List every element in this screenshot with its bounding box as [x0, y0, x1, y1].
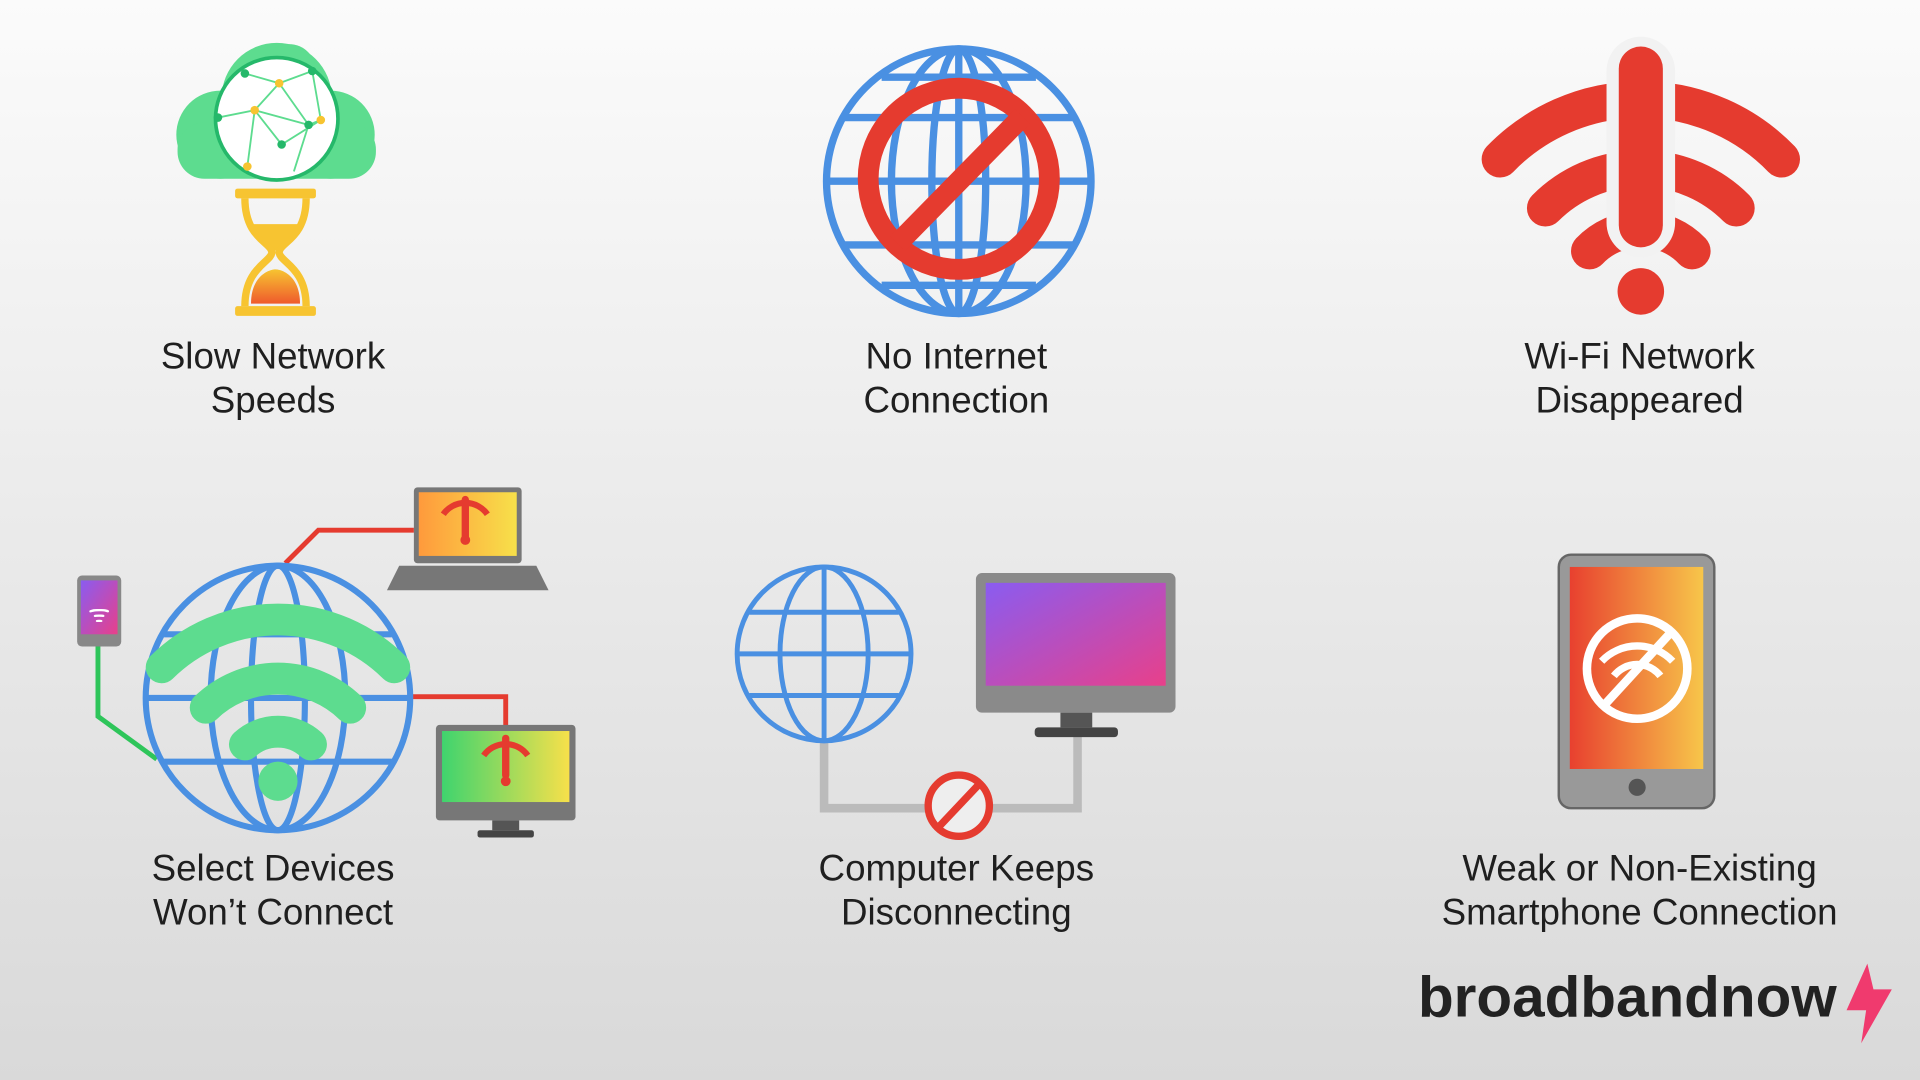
heading: select devices: Select Devices [152, 847, 394, 888]
icon: no internet globe [827, 49, 1091, 313]
logo: broadbandnow: broadbandnow [1418, 965, 1837, 1029]
icon: computer keeps disconnecting [737, 567, 1176, 836]
heading: select devices: Won’t Connect [153, 891, 393, 932]
heading: no internet: No Internet [865, 336, 1047, 377]
heading: slow network: Slow Network [161, 336, 385, 377]
icon: select devices: ᯤ [88, 601, 110, 628]
icon: select devices [77, 487, 576, 838]
icon: slow network (cloud + hourglass) [176, 43, 376, 316]
heading: smartphone: Smartphone Connection [1442, 891, 1838, 932]
heading: computer keeps disconnecting: Computer Keeps [819, 847, 1094, 888]
icon: smartphone [1559, 555, 1714, 808]
logo: broadbandnow [1418, 964, 1892, 1043]
heading: wifi disappeared: Wi-Fi Network [1524, 336, 1755, 377]
heading: wifi disappeared: Disappeared [1535, 380, 1744, 421]
heading: smartphone: Weak or Non-Existing [1462, 847, 1817, 888]
icon: wifi disappeared [1500, 37, 1782, 315]
heading: slow network: Speeds [211, 380, 335, 421]
heading: no internet: Connection [863, 380, 1049, 421]
heading: computer keeps disconnecting: Disconnecting [841, 891, 1072, 932]
